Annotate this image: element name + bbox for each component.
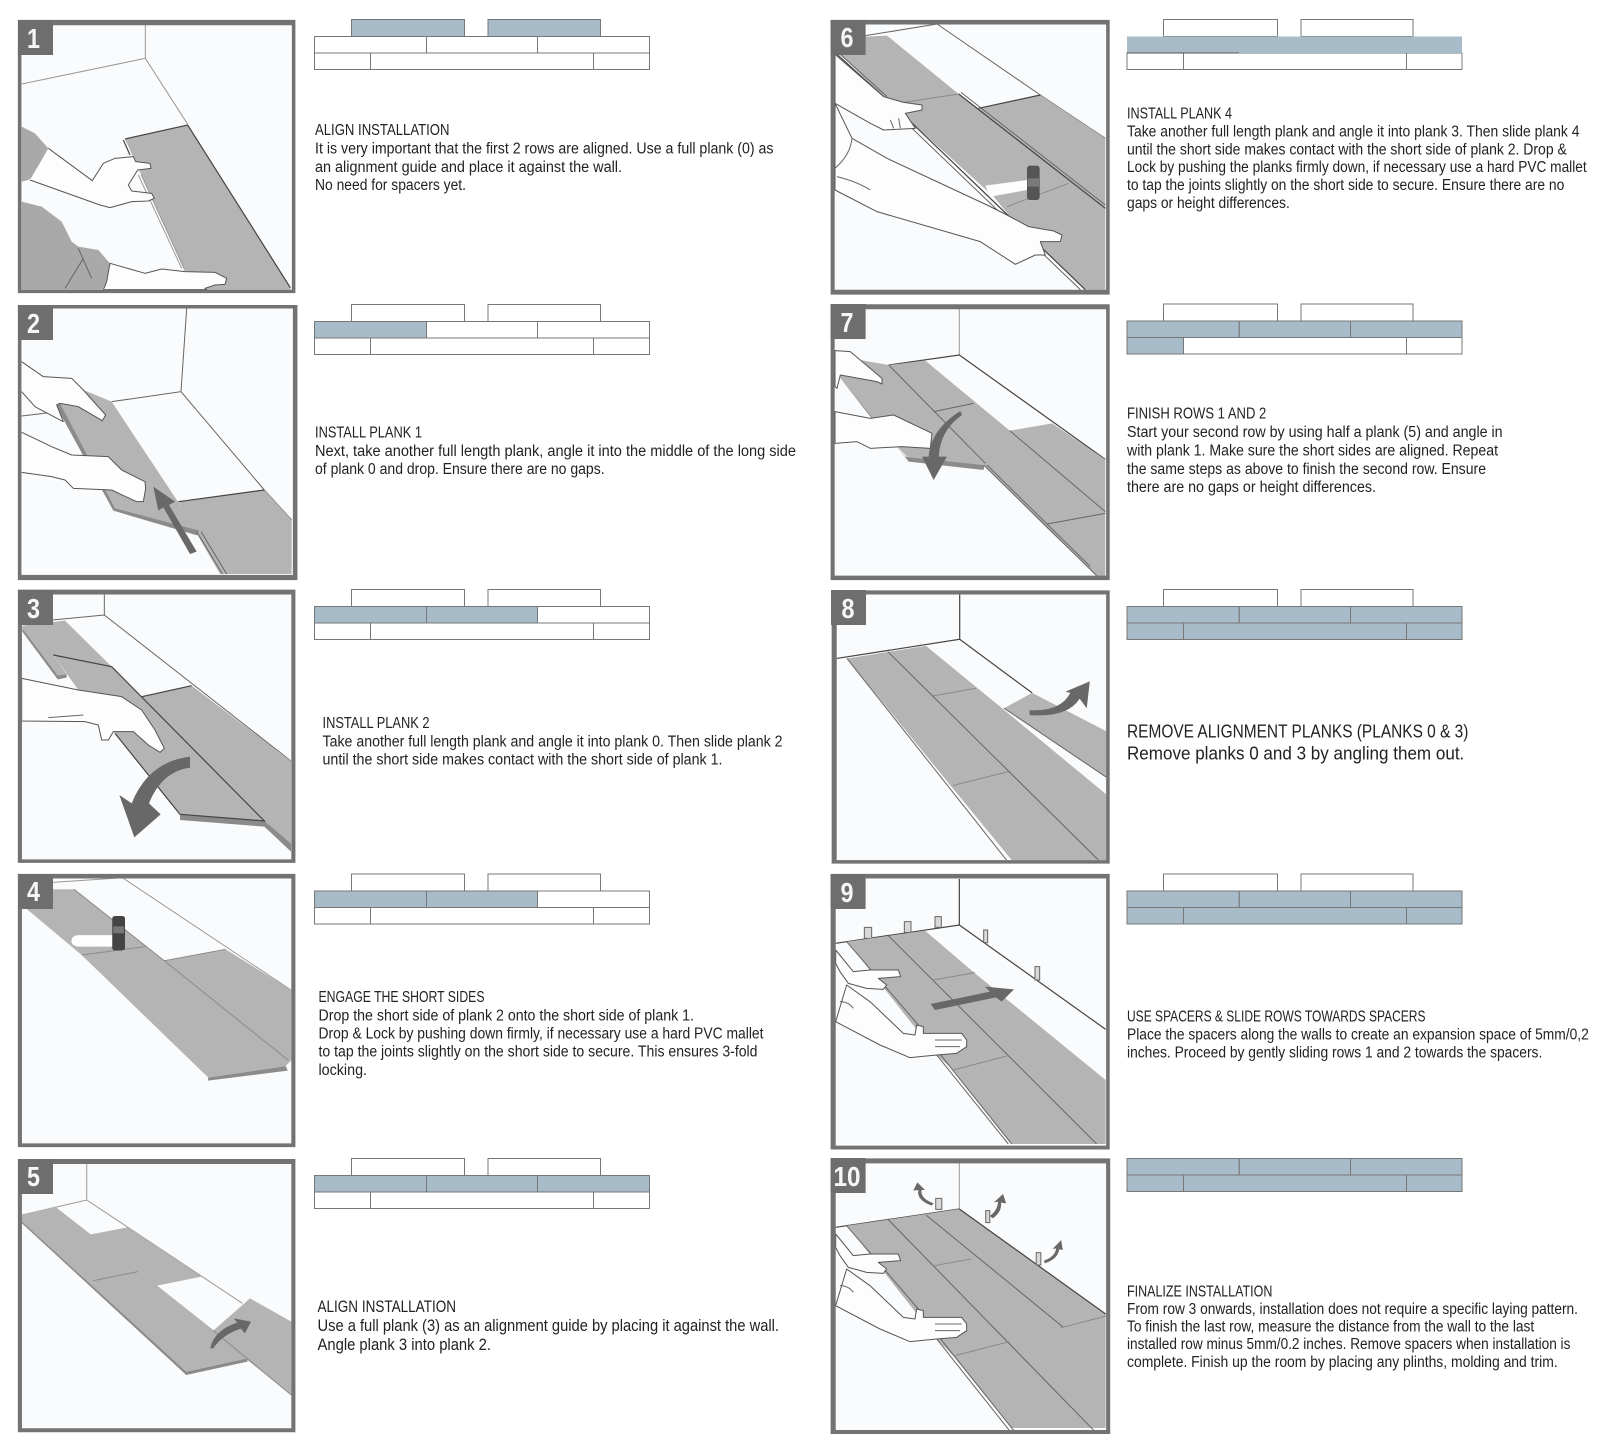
text: step 3 instructions: INSTALL PLANK 2 <box>322 715 430 732</box>
text: step 1 instructions: It is very important that the first 2 rows are aligned. Use a full plank (0) as <box>315 140 774 158</box>
panel: step 7 illustration: 7 <box>840 307 854 338</box>
panel: step 4 illustration: 4 <box>27 876 40 907</box>
text: step 7 instructions: the same steps as above to finish the second row. Ensure <box>1127 461 1486 478</box>
panel: step 2 illustration: 2 <box>27 308 40 339</box>
plank diagram: step 7 <box>1127 304 1462 354</box>
panel: step 6 illustration <box>831 20 1110 295</box>
text: step 8 instructions <box>1127 720 1468 764</box>
plank diagram: step 1 <box>314 20 650 70</box>
text: step 10 instructions: FINALIZE INSTALLATION <box>1127 1284 1272 1300</box>
text: step 9 instructions: USE SPACERS & SLIDE ROWS TOWARDS SPACERS <box>1127 1008 1426 1026</box>
text: step 7 instructions: FINISH ROWS 1 AND 2 <box>1127 406 1266 422</box>
text: step 9 instructions: inches. Proceed by gently sliding rows 1 and 2 towards the spacers. <box>1127 1044 1542 1062</box>
text: step 6 instructions: INSTALL PLANK 4 <box>1127 106 1232 122</box>
panel: step 2 illustration <box>18 305 297 580</box>
panel: step 8 illustration <box>831 590 1110 864</box>
text: step 4 instructions: to tap the joints slightly on the short side to secure. This ensures 3-fold <box>318 1044 758 1060</box>
plank diagram: step 5 <box>314 1158 650 1208</box>
text: step 10 instructions: complete. Finish up the room by placing any plinths, molding and trim. <box>1127 1354 1558 1371</box>
text: step 7 instructions: with plank 1. Make sure the short sides are aligned. Repeat <box>1126 442 1499 460</box>
text: step 3 instructions: Take another full length plank and angle it into plank 0. Then slide plank 2 <box>322 734 782 750</box>
text: step 4 instructions: Drop & Lock by pushing down firmly, if necessary use a hard PVC mallet <box>318 1026 764 1042</box>
text: step 9 instructions <box>1127 1008 1589 1062</box>
text: step 2 instructions: INSTALL PLANK 1 <box>315 424 422 442</box>
panel: step 3 illustration <box>18 590 295 863</box>
text: step 4 instructions: locking. <box>318 1062 367 1079</box>
plank diagram: step 10 <box>1127 1158 1462 1192</box>
panel: step 5 illustration: 5 <box>27 1161 40 1192</box>
plank diagram: step 6 <box>1127 20 1462 70</box>
plank diagram: step 8 <box>1127 590 1462 640</box>
text: step 3 instructions: until the short side makes contact with the short side of plank 1. <box>322 752 722 768</box>
text: step 2 instructions: Next, take another full length plank, angle it into the middle of the long side <box>315 443 796 460</box>
text: step 6 instructions: gaps or height differences. <box>1127 195 1290 212</box>
text: step 10 instructions <box>1127 1284 1578 1371</box>
text: step 2 instructions: of plank 0 and drop. Ensure there are no gaps. <box>315 461 605 478</box>
text: step 8 instructions: REMOVE ALIGNMENT PLANKS (PLANKS 0 & 3) <box>1127 720 1468 742</box>
text: step 7 instructions: there are no gaps or height differences. <box>1127 479 1376 496</box>
text: step 10 instructions: To finish the last row, measure the distance from the wall to the last <box>1127 1318 1535 1336</box>
text: step 4 instructions: ENGAGE THE SHORT SIDES <box>318 989 484 1006</box>
panel: step 5 illustration <box>18 1159 295 1432</box>
panel: step 4 illustration <box>18 874 295 1147</box>
panel: step 1 illustration: 1 <box>27 23 40 54</box>
plank diagram: step 9 <box>1127 874 1462 924</box>
text: step 2 instructions <box>315 424 796 478</box>
text: step 5 instructions: Use a full plank (3) as an alignment guide by placing it against the wall. <box>318 1317 779 1335</box>
text: step 1 instructions: No need for spacers yet. <box>315 177 466 194</box>
text: step 5 instructions: Angle plank 3 into plank 2. <box>318 1336 491 1354</box>
panel: step 3 illustration: 3 <box>27 593 40 624</box>
text: step 1 instructions <box>315 122 774 194</box>
plank diagram: step 4 <box>314 874 650 924</box>
text: step 1 instructions: ALIGN INSTALLATION <box>315 122 450 139</box>
text: step 4 instructions <box>318 989 764 1079</box>
panel: step 10 illustration <box>831 1158 1110 1434</box>
panel: step 9 illustration <box>831 874 1110 1149</box>
panel: step 10 illustration: 10 <box>834 1161 860 1192</box>
panel: step 8 illustration: 8 <box>842 593 854 624</box>
text: step 5 instructions <box>318 1298 779 1354</box>
text: step 3 instructions <box>322 715 782 768</box>
text: step 7 instructions: Start your second row by using half a plank (5) and angle in <box>1127 424 1503 441</box>
text: step 6 instructions <box>1127 106 1587 212</box>
text: step 4 instructions: Drop the short side of plank 2 onto the short side of plank 1. <box>318 1008 694 1024</box>
panel: step 1 illustration <box>18 20 295 293</box>
panel: step 9 illustration: 9 <box>840 877 854 908</box>
panel: step 6 illustration: 6 <box>840 22 854 53</box>
plank diagram: step 2 <box>314 304 650 354</box>
text: step 7 instructions <box>1126 406 1503 496</box>
text: step 5 instructions: ALIGN INSTALLATION <box>318 1298 456 1316</box>
panel: step 7 illustration <box>831 304 1110 580</box>
plank diagram: step 3 <box>314 590 650 640</box>
text: step 8 instructions: Remove planks 0 and 3 by angling them out. <box>1127 742 1464 764</box>
text: step 1 instructions: an alignment guide and place it against the wall. <box>315 159 622 176</box>
